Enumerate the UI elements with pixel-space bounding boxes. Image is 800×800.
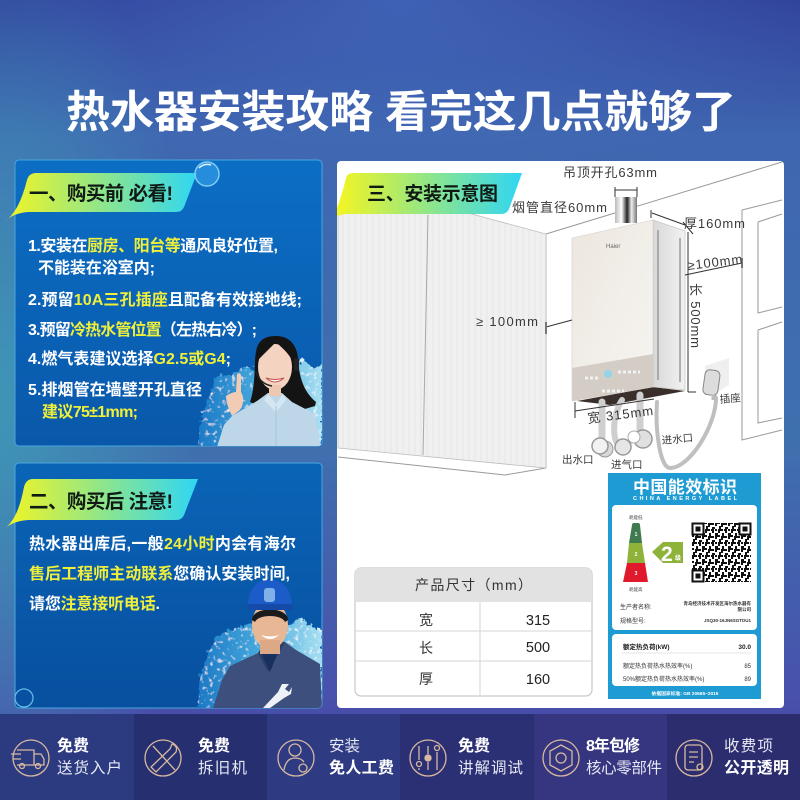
water heater: Haier bbox=[606, 244, 620, 250]
dimension labels bbox=[476, 165, 745, 471]
service: warranty: 核心零部件 bbox=[586, 759, 662, 777]
energy label: 3 bbox=[635, 571, 638, 577]
icon: water bubble bbox=[195, 162, 219, 186]
icon: person with gear bbox=[278, 740, 314, 776]
energy label: 1 bbox=[635, 532, 638, 538]
checklist text: 2.预留10A三孔插座且配备有效接地线; bbox=[28, 290, 302, 309]
table: product size: 160 bbox=[526, 672, 550, 688]
service: usage walkthrough: 讲解调试 bbox=[458, 759, 523, 777]
energy label: 中国能效标识 bbox=[633, 478, 737, 497]
icon: hex gear bbox=[543, 740, 579, 776]
service: fee transparency: 公开透明 bbox=[724, 759, 789, 777]
service: usage walkthrough bbox=[410, 736, 523, 777]
QR code bbox=[692, 523, 751, 582]
service: fee transparency: 收费项 bbox=[724, 737, 773, 755]
heading ribbon: before purchase: 一、购买前 必看! bbox=[29, 183, 173, 205]
energy label: CHINA ENERGY LABEL bbox=[633, 496, 738, 502]
checklist text: 4.燃气表建议选择G2.5或G4; bbox=[28, 349, 231, 368]
energy label: 限公司 bbox=[738, 606, 751, 613]
energy label: 耗能高 bbox=[629, 586, 643, 593]
water heater bbox=[572, 197, 716, 468]
checklist text: 建议75±1mm; bbox=[42, 403, 138, 421]
service: delivery: 送货入户 bbox=[57, 759, 122, 777]
dimension labels: 宽 315mm bbox=[587, 403, 654, 426]
energy label: 30.0 bbox=[738, 644, 751, 651]
panel: installation diagram bbox=[337, 161, 784, 708]
table: product size: 500 bbox=[526, 640, 550, 656]
icon: bubble bbox=[15, 689, 33, 707]
energy label: 依据国家标准: GB 20665–2015 bbox=[652, 690, 719, 697]
table: product size: 315 bbox=[526, 613, 550, 629]
panel: after purchase bbox=[5, 463, 322, 712]
notice text bbox=[29, 534, 296, 613]
icon: crossed tools bbox=[145, 740, 181, 776]
icon: document bbox=[676, 740, 712, 776]
checklist text: 5.排烟管在墙壁开孔直径 bbox=[28, 380, 202, 399]
notice text: 售后工程师主动联系您确认安装时间, bbox=[29, 564, 290, 583]
dimension lines bbox=[546, 187, 742, 418]
heading ribbon: before purchase bbox=[5, 173, 197, 221]
energy label: JSQ30-16JN6SGTDU1 bbox=[704, 618, 751, 623]
heading ribbon: after purchase bbox=[5, 479, 198, 528]
service: delivery bbox=[11, 736, 122, 777]
service: warranty bbox=[543, 736, 662, 777]
energy label: 规格型号: bbox=[620, 617, 646, 625]
dimension labels: 烟管直径60mm bbox=[512, 200, 607, 215]
valves and pipes bbox=[592, 395, 716, 468]
service strip bbox=[0, 714, 800, 800]
dimension labels: 长 500mm bbox=[688, 283, 703, 348]
dimension labels: 吊顶开孔63mm bbox=[563, 165, 657, 180]
wall and window lines bbox=[338, 162, 782, 475]
energy label: 85 bbox=[744, 664, 752, 670]
checklist text bbox=[28, 236, 302, 421]
energy label: 耗能低 bbox=[629, 514, 643, 521]
dimension labels: 厚160mm bbox=[684, 216, 745, 231]
energy label: 青岛经济技术开发区海尔热水器有 bbox=[684, 600, 751, 607]
dimension labels: ≥ 100mm bbox=[476, 314, 538, 329]
energy label: 级 bbox=[675, 554, 681, 562]
socket and plug bbox=[702, 358, 729, 400]
dimension labels: 进气口 bbox=[611, 458, 642, 471]
table: product size: 宽 bbox=[419, 612, 433, 628]
service: delivery: 免费 bbox=[57, 736, 89, 755]
panel: before purchase bbox=[5, 160, 322, 450]
service: warranty: 8年包修 bbox=[586, 736, 640, 755]
energy label: 50%额定热负荷热水热效率(%) bbox=[623, 675, 704, 683]
dimension labels: 进水口 bbox=[661, 432, 694, 447]
service: free labor bbox=[278, 737, 394, 777]
table: product size: 产品尺寸（mm） bbox=[415, 577, 532, 593]
energy label: 2 bbox=[661, 543, 673, 566]
dimension labels: ≥100mm bbox=[687, 251, 743, 273]
dimension labels: 出水口 bbox=[562, 453, 594, 466]
energy label: 89 bbox=[744, 677, 752, 683]
heading ribbon: installation diagram: 三、安装示意图 bbox=[367, 182, 498, 205]
illustration: agent with headset bbox=[197, 336, 322, 450]
service: usage walkthrough: 免费 bbox=[458, 736, 490, 755]
service: free labor: 安装 bbox=[329, 737, 360, 755]
dimension labels: 插座 bbox=[719, 391, 741, 406]
service: old unit removal: 拆旧机 bbox=[198, 759, 247, 777]
service: fee transparency bbox=[676, 737, 789, 777]
heading ribbon: after purchase: 二、购买后 注意! bbox=[29, 490, 173, 513]
icon: sliders bbox=[410, 740, 446, 776]
service: free labor: 免人工费 bbox=[329, 758, 394, 777]
service: old unit removal bbox=[145, 736, 247, 777]
notice text: 请您注意接听电话. bbox=[29, 594, 160, 613]
illustration: engineer in helmet bbox=[197, 580, 322, 712]
notice text: 热水器出库后,一般24小时内会有海尔 bbox=[29, 534, 296, 553]
service: old unit removal: 免费 bbox=[198, 736, 230, 755]
energy label bbox=[608, 473, 761, 699]
title: 热水器安装攻略 看完这几点就够了 bbox=[66, 88, 736, 137]
cabinet bbox=[338, 213, 546, 468]
icon: truck bbox=[11, 740, 49, 776]
energy label: 额定热负荷(kW) bbox=[623, 642, 670, 651]
checklist text: 不能装在浴室内; bbox=[38, 258, 155, 277]
checklist text: 1.安装在厨房、阳台等通风良好位置, bbox=[28, 236, 278, 255]
energy label: 生产者名称: bbox=[620, 603, 652, 611]
energy label: 额定热负荷热水热效率(%) bbox=[623, 662, 692, 670]
energy label: 2 bbox=[635, 552, 638, 558]
table: product size: 厚 bbox=[419, 671, 433, 687]
table: product size bbox=[355, 568, 592, 696]
table: product size: 长 bbox=[419, 640, 433, 656]
checklist text: 3.预留冷热水管位置（左热右冷）; bbox=[28, 320, 257, 339]
heading ribbon: installation diagram bbox=[337, 173, 522, 216]
